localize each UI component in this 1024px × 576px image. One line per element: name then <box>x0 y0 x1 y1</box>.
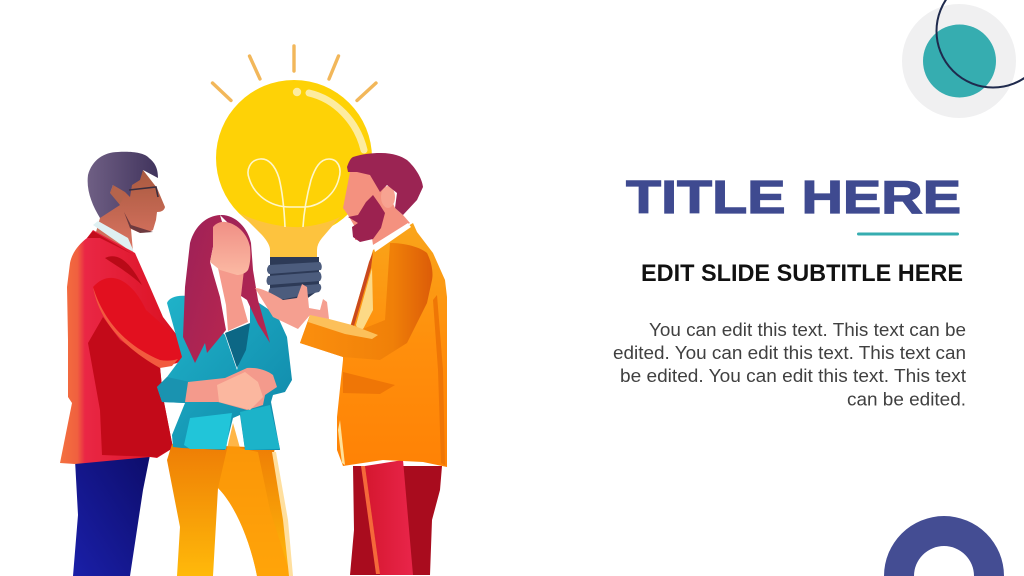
title: TITLE HERE <box>626 171 961 223</box>
bulb screw base <box>266 257 322 300</box>
man trousers <box>73 455 150 576</box>
bulb rays <box>212 46 376 100</box>
man collar <box>93 221 134 252</box>
body text: be edited. You can edit this text. This text <box>620 366 966 386</box>
woman arms and clasped hands <box>185 368 277 410</box>
man hair <box>347 153 423 215</box>
woman neck <box>218 268 248 331</box>
figure: man in orange jacket <box>255 153 447 575</box>
icon: light bulb <box>212 46 376 300</box>
jacket lower shade <box>88 317 173 457</box>
man neck and face <box>96 170 165 252</box>
man trousers <box>350 466 442 575</box>
woman inner top <box>225 323 250 368</box>
man collar <box>373 223 411 252</box>
woman jacket <box>157 296 292 450</box>
woman face <box>210 222 250 275</box>
man hair <box>88 152 158 218</box>
man ear <box>111 186 123 204</box>
decoration: top-right circles <box>902 0 1024 118</box>
illustration: team around a light bulb <box>60 46 447 576</box>
man jacket <box>300 223 447 467</box>
body text: edited. You can edit this text. This text can <box>613 343 966 363</box>
body text: can be edited. <box>847 390 966 410</box>
woman hair <box>183 215 226 363</box>
decoration: bottom-right ring <box>884 516 1004 576</box>
man glasses <box>129 187 158 197</box>
title underline <box>857 232 959 236</box>
jacket sleeve <box>93 278 185 367</box>
body text: You can edit this text. This text can be <box>649 320 966 340</box>
subtitle: EDIT SLIDE SUBTITLE HERE <box>641 260 963 287</box>
man gesturing hand <box>255 284 329 329</box>
man ear <box>381 186 395 208</box>
figure: man in red jacket <box>60 152 185 576</box>
figure: woman in teal jacket <box>157 215 293 576</box>
body text <box>613 320 966 410</box>
woman trousers <box>167 444 291 576</box>
jacket sleeve <box>300 243 432 360</box>
man beard <box>348 195 385 242</box>
man neck and face <box>343 168 410 245</box>
man beard line <box>124 212 153 233</box>
man jacket <box>60 230 185 464</box>
